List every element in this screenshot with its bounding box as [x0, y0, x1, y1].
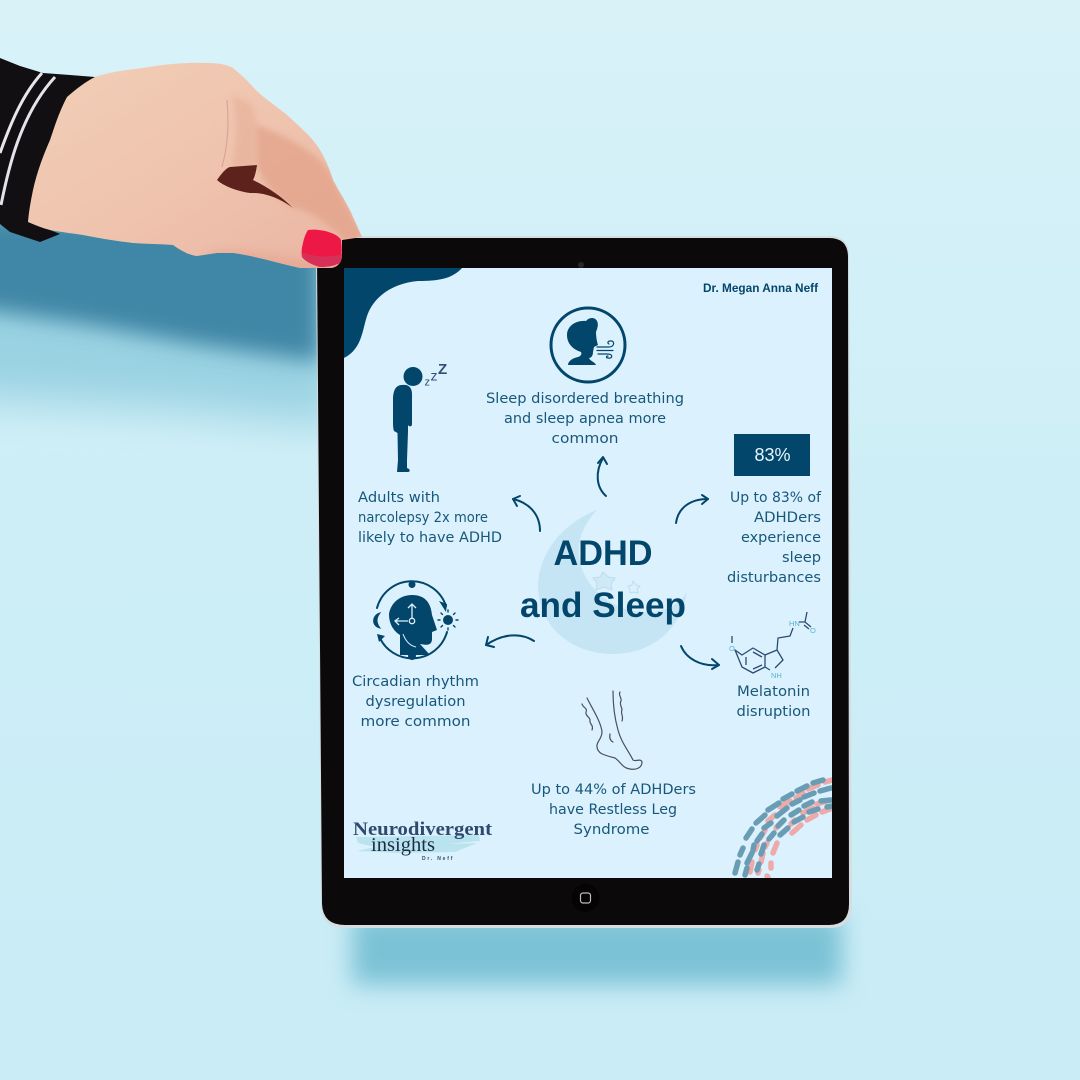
title: and Sleep: [520, 586, 686, 625]
logo: Neurodivergent Insights: insights: [371, 834, 435, 856]
hand holding the tablet: [0, 58, 362, 268]
arrow: to apnea: [598, 457, 607, 496]
icon: sleeping person: z: [430, 368, 438, 384]
melatonin text: disruption: [736, 703, 810, 720]
icon: melatonin molecule: [729, 612, 816, 680]
home button: [572, 884, 600, 912]
fingernail: [302, 230, 342, 267]
arrow: to 83%: [676, 495, 708, 523]
narcolepsy text: Adults with: [358, 489, 440, 506]
stat box: 83%: 83%: [754, 445, 791, 465]
icon: melatonin molecule: O: [810, 626, 816, 635]
circadian text: dysregulation: [366, 693, 466, 710]
finger shading: [256, 125, 362, 240]
restless leg text: Up to 44% of ADHDers: [531, 781, 696, 798]
camera: [578, 262, 584, 268]
icon: circadian rhythm head: [374, 581, 458, 660]
sleep apnea text: Sleep disordered breathing: [486, 390, 684, 407]
circadian text: more common: [360, 713, 470, 730]
icon: sleeping person: [393, 361, 447, 472]
hand shadow: [0, 215, 340, 425]
icon: head breathing: [551, 308, 625, 382]
sleep disturbances text: Up to 83% of: [730, 489, 822, 506]
logo: Neurodivergent Insights: Neurodivergent: [353, 819, 493, 840]
narcolepsy text: likely to have ADHD: [358, 529, 502, 546]
tablet shadow: [352, 915, 842, 985]
icon: melatonin molecule: HN: [789, 619, 800, 628]
thumb shading: [212, 251, 340, 268]
restless leg text: Syndrome: [574, 821, 650, 838]
melatonin text: Melatonin: [737, 683, 810, 700]
tablet body: [316, 236, 852, 928]
decorative dashes: bottom-right corner: [735, 780, 832, 877]
logo: Neurodivergent Insights: [353, 819, 493, 862]
decorative blob: top-left corner: [344, 268, 462, 358]
sleep disturbances text: disturbances: [727, 569, 821, 586]
sleep disturbances text: ADHDers: [754, 509, 821, 526]
stat box: 83%: [734, 434, 810, 476]
narcolepsy text: narcolepsy 2x more: [358, 509, 488, 526]
screen panel: [344, 268, 832, 878]
sleep apnea text: and sleep apnea more: [504, 410, 666, 427]
arrow: to melatonin: [681, 646, 719, 669]
icon: sleeping person: Z: [438, 361, 447, 378]
circadian text: Circadian rhythm: [352, 673, 479, 690]
author credit: Dr. Megan Anna Neff: [703, 281, 819, 295]
icon: sleeping person: z: [424, 376, 430, 388]
hand: [28, 62, 362, 268]
sleep disturbances text: sleep: [782, 549, 821, 566]
arrow: to circadian: [486, 635, 534, 647]
logo: Neurodivergent Insights: Dr. Neff: [422, 856, 454, 862]
restless leg text: have Restless Leg: [549, 801, 677, 818]
title: ADHD: [554, 534, 652, 573]
icon: restless leg foot: [582, 691, 642, 769]
arrow: to narcolepsy: [513, 496, 540, 531]
moon illustration: [538, 510, 687, 654]
icon: melatonin molecule: NH: [771, 671, 782, 680]
icon: melatonin molecule: O: [729, 644, 735, 653]
knuckle shadow: [217, 165, 293, 208]
sleep disturbances text: experience: [741, 529, 821, 546]
sleeve: [0, 58, 95, 242]
sleep apnea text: common: [552, 430, 618, 447]
